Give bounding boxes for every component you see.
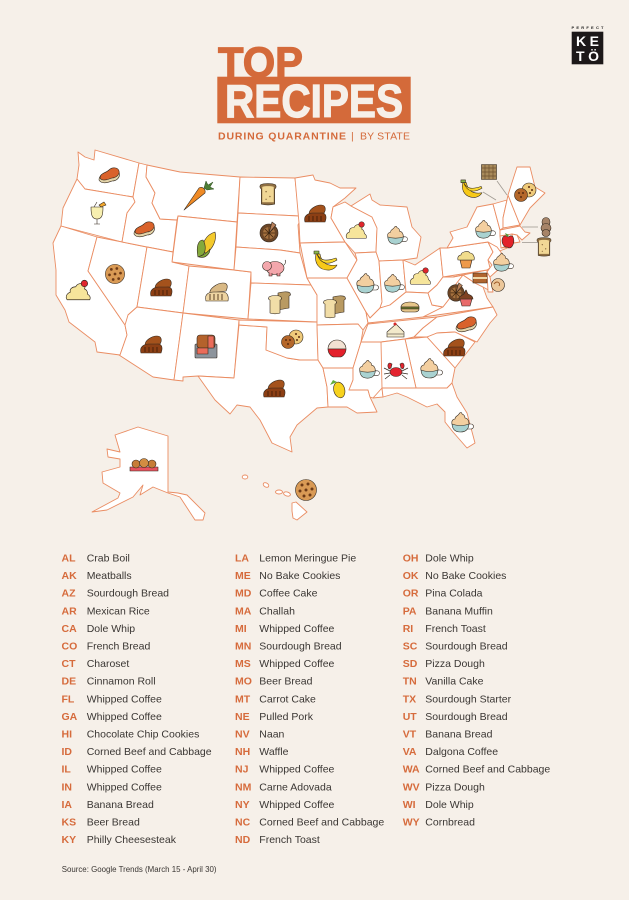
recipe list: column 2	[235, 552, 384, 846]
recipe list: column 3: Vanilla Cake	[425, 676, 484, 688]
state: AL	[373, 339, 416, 398]
icon: AL crab boil	[384, 363, 408, 379]
icon: AZ sourdough bread	[141, 336, 162, 353]
icon: SC sourdough bread	[444, 339, 465, 356]
recipe list: column 3: VA	[403, 746, 417, 758]
icon: SD pizza dough	[260, 222, 278, 242]
icon: CO french bread	[206, 283, 228, 301]
icon: CT charoset apple	[502, 233, 514, 248]
recipe list: column 2: MA	[235, 605, 252, 617]
subtitle: divider: |	[351, 130, 354, 142]
recipe list: column 1: Cinnamon Roll	[87, 676, 156, 688]
recipe list: column 1: DE	[62, 676, 76, 688]
recipe list: column 3: SD	[403, 658, 418, 670]
leader lines	[483, 181, 538, 242]
recipe list: column 2: Beer Bread	[259, 676, 313, 688]
recipe list: column 1: Banana Bread	[87, 799, 154, 811]
state: CA	[53, 226, 127, 355]
state: MS	[349, 342, 382, 398]
state: WV	[428, 275, 463, 307]
icon: AK meatballs	[130, 458, 158, 471]
icon: OH dole whip	[410, 268, 431, 284]
recipe list: column 3: Dole Whip	[425, 552, 474, 564]
icon: NJ whipped coffee	[494, 253, 513, 271]
state: KS	[248, 283, 317, 322]
icon: MI whipped coffee	[388, 226, 407, 244]
recipe list: column 1: CT	[62, 658, 76, 670]
recipe list: column 2: Sourdough Bread	[259, 640, 342, 652]
recipe list: column 1: Whipped Coffee	[87, 693, 162, 705]
recipe list: column 3: French Toast	[425, 623, 486, 635]
recipe list: column 1: French Bread	[87, 640, 150, 652]
title: RECIPES: RECIPES	[225, 75, 403, 127]
recipe list: column 1: GA	[62, 711, 78, 723]
icon: MN sourdough bread	[305, 205, 326, 222]
state: FL	[382, 383, 475, 448]
recipe list: column 2: ND	[235, 834, 251, 846]
icon: VT banana bread	[461, 180, 482, 197]
icon: VA dalgona coffee	[459, 290, 473, 306]
icon: MA challah	[541, 218, 551, 236]
icon: MT carrot	[184, 181, 214, 210]
recipe list: column 1: Whipped Coffee	[87, 781, 162, 793]
state: NC	[414, 307, 497, 342]
recipe list: column 1: AK	[62, 570, 77, 582]
recipe list: column 2: Challah	[259, 605, 295, 617]
state: MI	[351, 194, 421, 261]
state: KY	[366, 292, 443, 323]
recipe list: column 1: Meatballs	[87, 570, 132, 582]
recipe list: column 1: HI	[62, 728, 72, 740]
state: ID	[122, 163, 177, 252]
recipe list: column 2: Whipped Coffee	[259, 658, 335, 670]
recipe list: column 3: Dole Whip	[425, 799, 474, 811]
recipe list: column 2: Waffle	[259, 746, 289, 758]
state: WY	[172, 216, 237, 270]
recipe list: column 2: Pulled Pork	[259, 711, 314, 723]
icon: NY whipped coffee	[476, 220, 495, 238]
recipe list: column 2: Lemon Meringue Pie	[259, 552, 356, 564]
recipe list: column 3: Banana Bread	[425, 728, 493, 740]
state: MD	[453, 270, 492, 292]
recipe list: column 1: Whipped Coffee	[87, 711, 162, 723]
icon: KY philly cheesesteak	[401, 302, 419, 312]
icon: MD coffee cake	[473, 273, 487, 283]
icon: CA dole whip	[66, 280, 90, 300]
title banner	[217, 77, 411, 123]
recipe list: column 1: Dole Whip	[87, 623, 135, 635]
recipe list: column 1: Mexican Rice	[87, 605, 150, 617]
icon: ND french toast	[260, 184, 276, 205]
state: WA	[77, 150, 139, 197]
title block	[217, 39, 411, 142]
state: MT	[146, 165, 240, 222]
state: CT	[500, 234, 514, 248]
icon: NC corned beef	[456, 317, 476, 332]
recipe list: column 3: Pizza Dough	[425, 658, 485, 670]
recipe list: column 2: MS	[235, 658, 251, 670]
recipe list: column 2: French Toast	[259, 834, 320, 846]
state: VA	[423, 275, 493, 317]
recipe list: column 3: Pina Colada	[425, 588, 483, 600]
icon: ME no bake cookies	[514, 183, 536, 202]
recipe list: column 2: Whipped Coffee	[259, 623, 335, 635]
recipe list: column 2: Corned Beef and Cabbage	[259, 816, 384, 828]
state: NV	[88, 237, 147, 325]
state: TX	[198, 325, 328, 452]
recipe list: column 2: NE	[235, 711, 250, 723]
recipe list: column 1: Beer Bread	[87, 816, 140, 828]
icon: WY corn	[197, 232, 216, 257]
icon: IA banana bread	[314, 251, 337, 270]
recipe list: column 2: NY	[235, 799, 250, 811]
state: AZ	[119, 307, 183, 380]
icon: KS beer bread	[269, 292, 290, 314]
recipe list: column 2: NC	[235, 816, 251, 828]
recipe list: column 2: MN	[235, 640, 251, 652]
recipe list: column 2: NH	[235, 746, 250, 758]
recipe list: column 1: Philly Cheesesteak	[87, 834, 177, 846]
state: SC	[427, 332, 475, 368]
state: SD	[236, 213, 300, 253]
state: MO	[307, 278, 368, 330]
state: WI	[331, 202, 377, 253]
recipe list: column 1: Sourdough Bread	[87, 588, 169, 600]
state: VT	[493, 200, 507, 230]
recipe list: column 3: Dalgona Coffee	[425, 746, 498, 758]
state: GA	[405, 337, 455, 388]
recipe list: column 1: Whipped Coffee	[87, 764, 162, 776]
state: LA	[323, 368, 377, 413]
logo: Perfect Keto: PERFECT	[572, 25, 604, 30]
recipe list: column 2: MI	[235, 623, 247, 635]
subtitle: during quarantine: DURING QUARANTINE	[218, 130, 346, 142]
recipe list: column 2: MT	[235, 693, 251, 705]
logo: Perfect Keto	[572, 25, 604, 64]
state: CO	[183, 266, 251, 319]
state: TN	[361, 317, 437, 342]
source note: Source: Google Trends (March 15 - April 30)	[62, 865, 217, 874]
recipe list: column 3: SC	[403, 640, 418, 652]
recipe list: column 3: WY	[403, 816, 420, 828]
recipe list: column 3: TX	[403, 693, 416, 705]
recipe list: column 2: NV	[235, 728, 250, 740]
recipe list: column 2: MD	[235, 588, 252, 600]
map of the United States	[53, 150, 545, 520]
state: RI	[512, 234, 520, 243]
recipe list: column 1: IL	[62, 764, 71, 776]
icon: HI chocolate chip cookies	[296, 480, 316, 500]
recipe list: column 1: Corned Beef and Cabbage	[87, 746, 212, 758]
state: HI	[242, 475, 307, 520]
recipe list: column 1: FL	[62, 693, 75, 705]
recipe list: column 3	[403, 552, 550, 828]
icon: NE pulled pork pig	[262, 260, 286, 276]
icon: UT sourdough bread	[151, 279, 172, 296]
icon: MS whipped coffee	[360, 360, 379, 378]
recipe list: column 2: LA	[235, 552, 249, 564]
recipe list: column 1: KS	[62, 816, 76, 828]
state: OK	[239, 320, 318, 360]
recipe list: column 1: KY	[62, 834, 76, 846]
recipe list: column 3: Sourdough Bread	[425, 640, 508, 652]
icon: FL whipped coffee	[452, 412, 474, 432]
state: MN	[295, 175, 356, 243]
recipe list: column 3: WI	[403, 799, 416, 811]
state: AR	[317, 324, 363, 368]
state: UT	[137, 247, 189, 313]
icon: WA corned beef	[99, 168, 119, 183]
icon: GA whipped coffee	[421, 358, 442, 378]
recipe list: column 1: AL	[62, 552, 76, 564]
state: NY	[447, 204, 510, 252]
state: IL	[347, 252, 382, 318]
icon: IN whipped coffee	[385, 274, 404, 292]
subtitle: by state: BY STATE	[360, 130, 410, 142]
logo: Perfect Keto: KE	[576, 33, 599, 49]
recipe list: column 2: Naan	[259, 728, 285, 740]
icon: IL whipped coffee	[357, 274, 378, 293]
icon: ID corned beef	[134, 222, 154, 237]
logo: Perfect Keto: TÖ	[576, 48, 599, 64]
recipe list: column 1: Chocolate Chip Cookies	[87, 728, 199, 740]
icon: RI french toast	[537, 238, 551, 256]
recipe list: column 3: TN	[403, 676, 417, 688]
state: OH	[403, 248, 443, 293]
recipe list: column 2: NJ	[235, 764, 249, 776]
state: ME	[508, 167, 545, 225]
icon: OK no bake cookies	[282, 330, 303, 348]
icon: OR pina colada	[91, 202, 106, 224]
state: NM	[174, 313, 239, 381]
recipe list: column 3: No Bake Cookies	[425, 570, 506, 582]
state: PA	[440, 242, 493, 277]
recipe list: column 3: Corned Beef and Cabbage	[425, 764, 550, 776]
recipe list: column 1: IA	[62, 799, 72, 811]
recipe list: column 2: NM	[235, 781, 252, 793]
recipe list: column 1: Charoset	[87, 658, 129, 670]
recipe list: column 3: Sourdough Starter	[425, 693, 512, 705]
recipe list: column 2: ME	[235, 570, 251, 582]
icon: WV pizza dough	[448, 283, 464, 301]
recipe list: column 3: OR	[403, 588, 419, 600]
state: IA	[300, 242, 357, 278]
icon: LA lemon meringue pie	[330, 380, 347, 399]
icon: TN vanilla cake	[387, 322, 404, 337]
recipe list: column 2: Carne Adovada	[259, 781, 332, 793]
state: NJ	[487, 242, 503, 277]
recipe list: column 2: Coffee Cake	[259, 588, 318, 600]
recipe list: column 1: ID	[62, 746, 72, 758]
recipe list: column 3: UT	[403, 711, 417, 723]
icon: PA banana muffin	[458, 252, 474, 268]
recipe list: column 3: Cornbread	[425, 816, 475, 828]
recipe list: column 3: Sourdough Bread	[425, 711, 508, 723]
state: IN	[379, 260, 406, 308]
icon: NH waffle	[482, 164, 496, 180]
state: NH	[503, 195, 520, 228]
state: NE	[234, 247, 311, 285]
icon: MO beer bread	[324, 296, 345, 318]
state: ND	[238, 177, 299, 216]
recipe list: column 3: OK	[403, 570, 419, 582]
recipe list: column 3: PA	[403, 605, 417, 617]
icon: AR mexican rice	[328, 340, 346, 357]
recipe list: column 2: Whipped Coffee	[259, 764, 335, 776]
recipe list: column 2: Carrot Cake	[259, 693, 316, 705]
recipe list: column 3: RI	[403, 623, 413, 635]
icon: NV naan	[105, 264, 125, 284]
recipe list: column 1: AR	[62, 605, 77, 617]
title: TOP: TOP	[218, 39, 303, 87]
recipe list: column 3: Banana Muffin	[425, 605, 493, 617]
recipe list: column 3: Pizza Dough	[425, 781, 485, 793]
recipe list: column 1: IN	[62, 781, 72, 793]
recipe list: column 1: CA	[62, 623, 77, 635]
state: OR	[61, 179, 135, 242]
icon: DE cinnamon roll	[492, 278, 504, 292]
icon: TX sourdough starter	[264, 380, 285, 397]
recipe list: column 1: CO	[62, 640, 77, 652]
recipe list: column 3: WA	[403, 764, 420, 776]
state: DE	[487, 270, 493, 292]
recipe list: column 3: WV	[403, 781, 420, 793]
recipe list: column 1: Crab Boil	[87, 552, 130, 564]
recipe list: column 2: No Bake Cookies	[259, 570, 340, 582]
recipe list: column 3: VT	[403, 728, 417, 740]
state: AK	[92, 427, 205, 520]
recipe list: column 2: Whipped Coffee	[259, 799, 335, 811]
icon: WI dole whip	[346, 222, 367, 238]
recipe list: column 1: AZ	[62, 588, 76, 600]
recipe list: column 1	[62, 552, 212, 846]
state: MA	[500, 226, 530, 240]
icon: NM carne adovada	[195, 335, 217, 358]
recipe list: column 3: OH	[403, 552, 418, 564]
recipe list: column 2: MO	[235, 676, 252, 688]
